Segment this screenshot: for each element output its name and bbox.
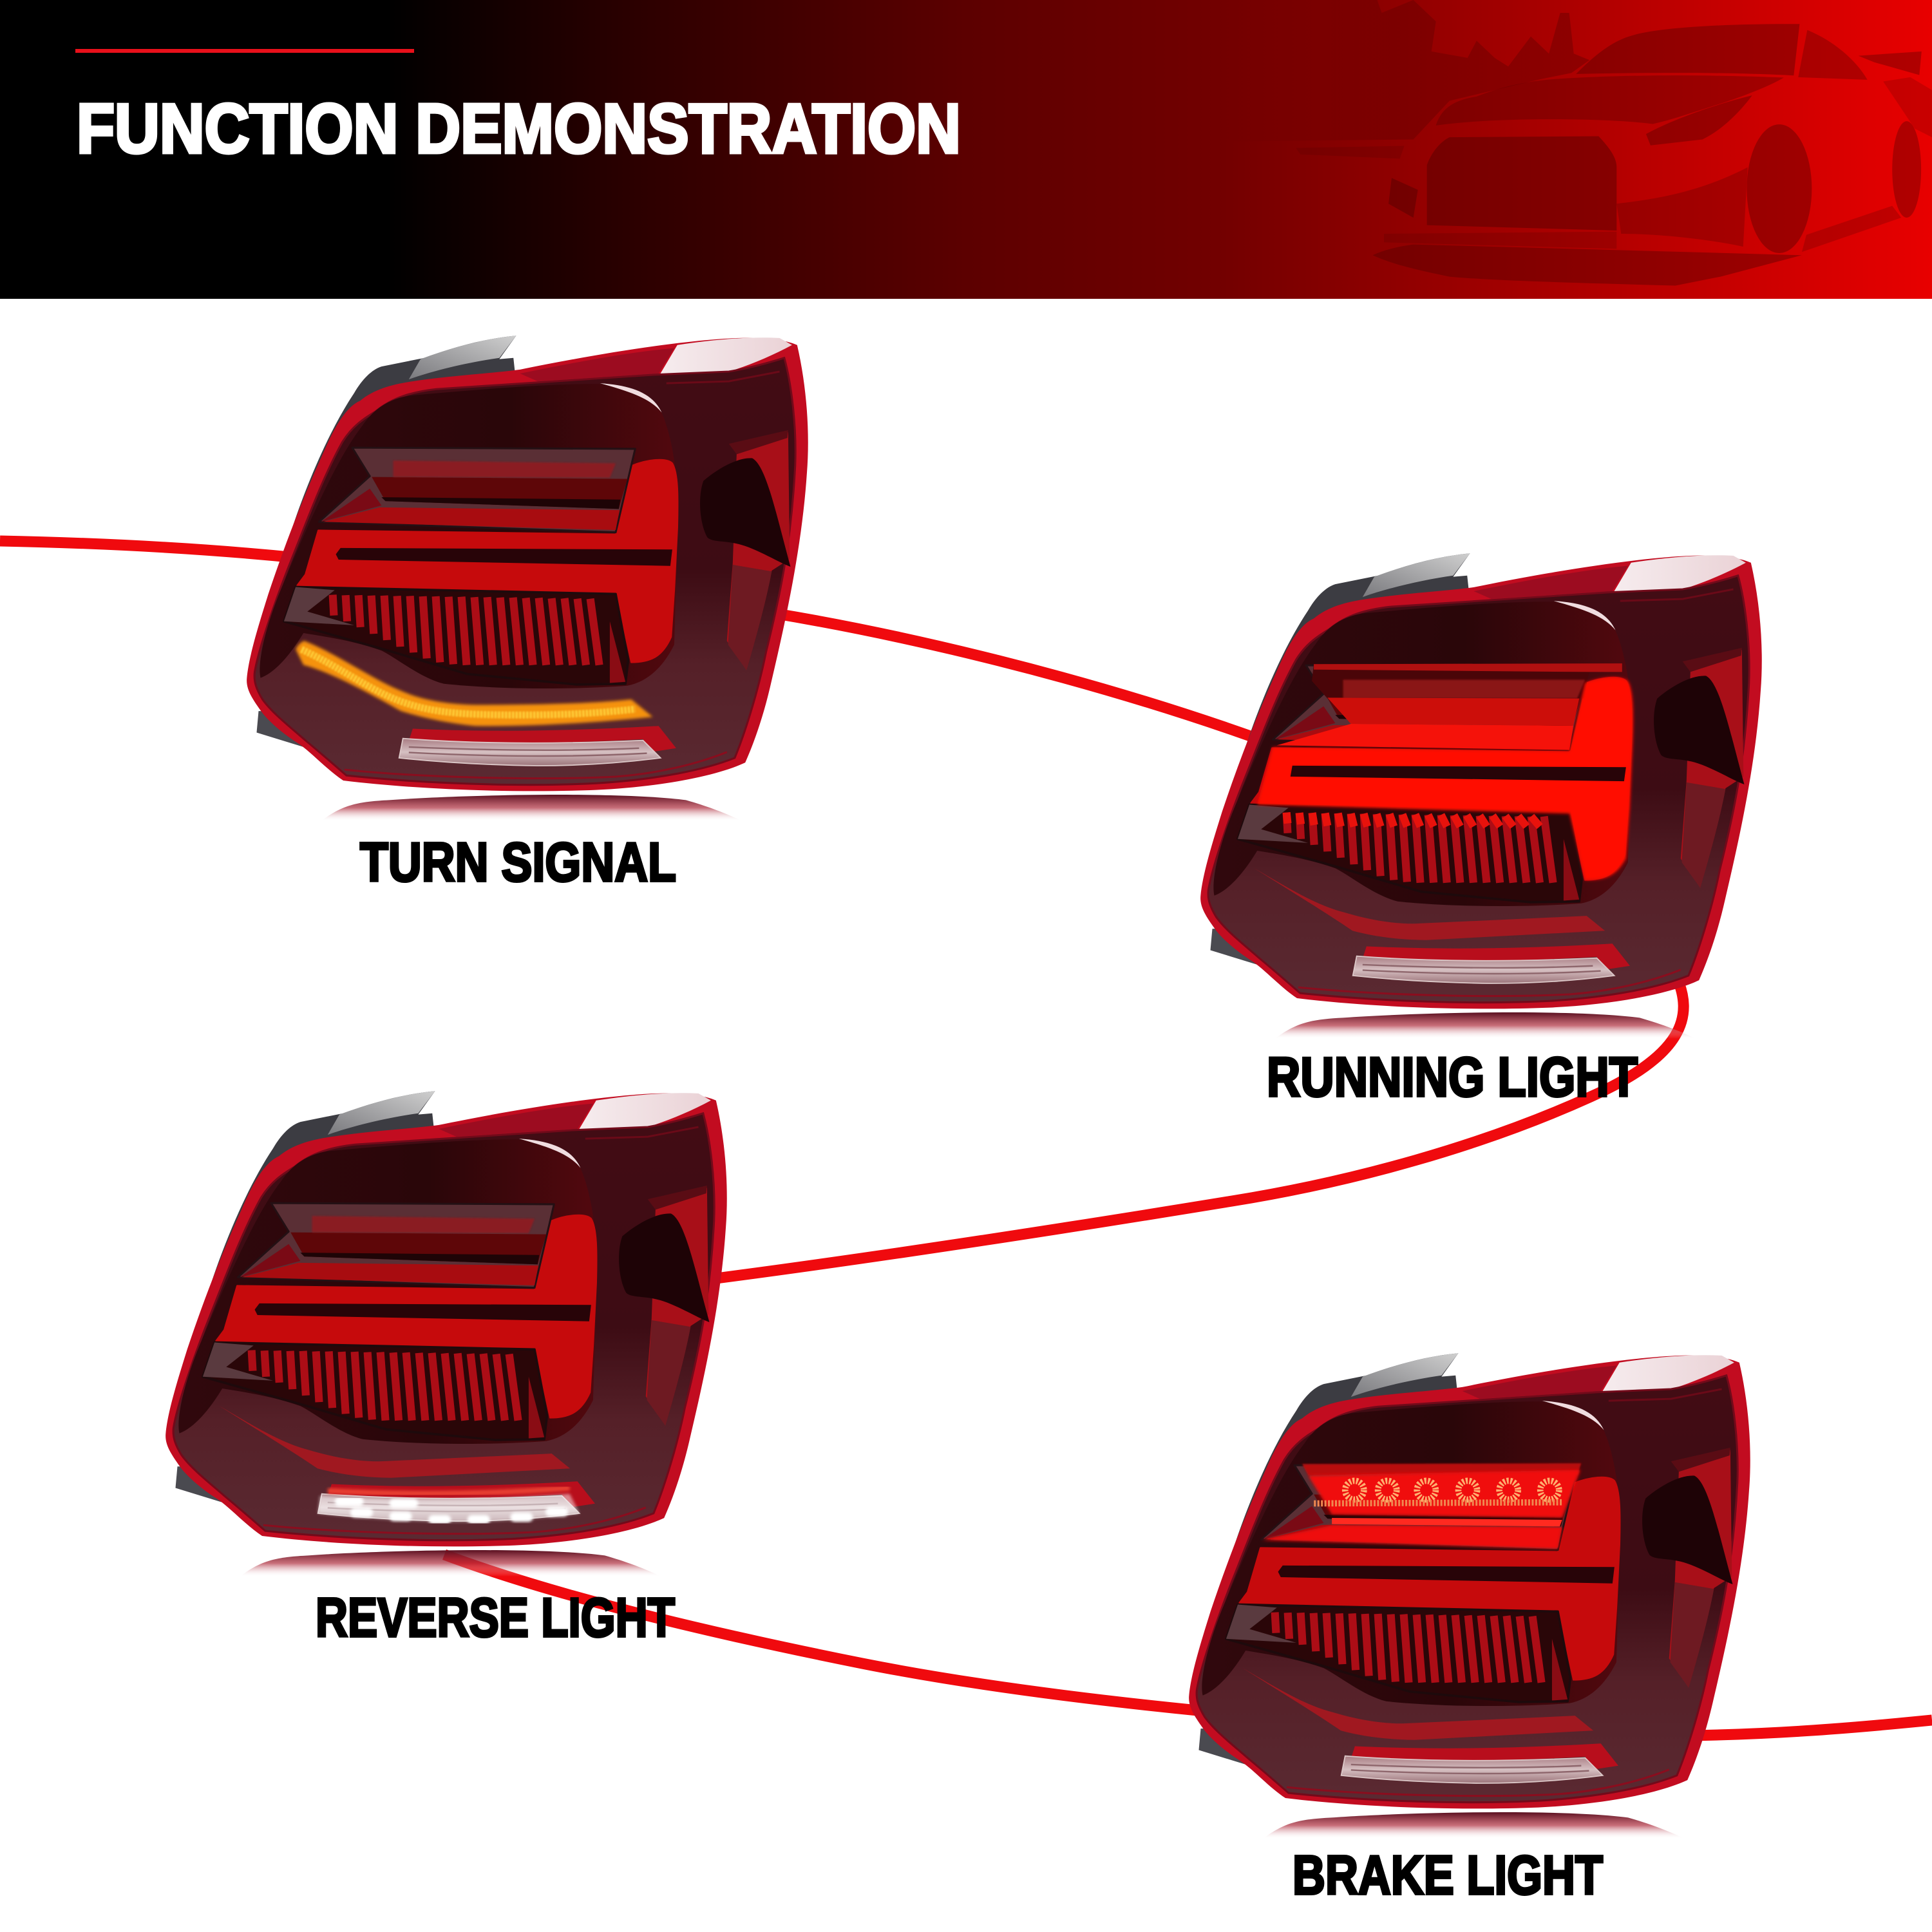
connecting red wire: [0, 541, 1932, 1736]
tail light: brake light: [1189, 1353, 1750, 1839]
lit brake LEDs: [1262, 1463, 1581, 1549]
lit running light bar: [1254, 663, 1633, 940]
title: FUNCTION DEMONSTRATION: [77, 90, 961, 168]
tail light: running light: [1200, 553, 1762, 1039]
lit reverse lamp: [318, 1488, 580, 1522]
dim lower red band: [219, 1406, 570, 1478]
label: running light: RUNNING LIGHT: [1267, 1046, 1638, 1108]
amber turn strip: [296, 641, 653, 726]
label: reverse light: REVERSE LIGHT: [316, 1587, 675, 1649]
label: turn signal: TURN SIGNAL: [360, 832, 676, 893]
tail light: turn signal: [247, 336, 808, 821]
header banner: [0, 0, 1932, 299]
tail light: reverse light: [166, 1091, 727, 1577]
icon: sports car silhouette: [1224, 0, 1932, 286]
accent line: [75, 49, 414, 53]
dim lower red band: [1242, 1668, 1593, 1740]
label: brake light: BRAKE LIGHT: [1293, 1845, 1603, 1906]
